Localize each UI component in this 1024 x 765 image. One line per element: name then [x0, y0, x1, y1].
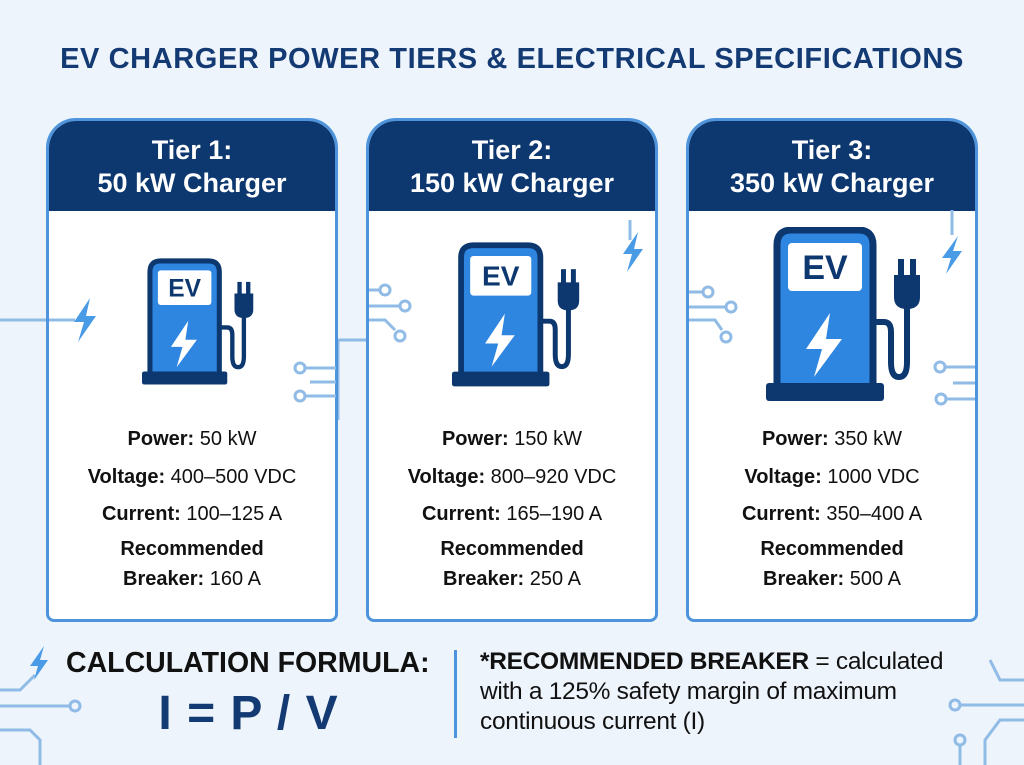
- panel: tier 3: [686, 118, 978, 622]
- heading tier 2: 150 kW Charger: [410, 168, 614, 198]
- divider: [454, 650, 457, 738]
- icon: charger tier 2: EV: [482, 261, 520, 292]
- specs tier 1: Voltage: 400–500 VDC: [88, 466, 296, 488]
- breaker note: continuous current (I): [480, 708, 705, 735]
- icon: charger tier 3: [766, 227, 920, 401]
- heading tier 2: [369, 121, 655, 211]
- formula heading: CALCULATION FORMULA:: [66, 647, 430, 679]
- specs tier 2: [408, 428, 616, 590]
- icon: charger tier 3: EV: [802, 249, 848, 287]
- specs tier 1: Recommended: [120, 538, 264, 560]
- specs tier 2: Voltage: 800–920 VDC: [408, 466, 616, 488]
- panel: tier 2: [366, 118, 658, 622]
- specs tier 1: [88, 428, 296, 590]
- specs tier 2: Recommended: [440, 538, 584, 560]
- icon: charger tier 2: [452, 242, 580, 386]
- specs tier 1: Current: 100–125 A: [102, 503, 282, 525]
- breaker note: *RECOMMENDED BREAKER = calculated: [480, 648, 943, 675]
- breaker note: with a 125% safety margin of maximum: [480, 678, 897, 705]
- specs tier 2: Current: 165–190 A: [422, 503, 602, 525]
- specs tier 3: Current: 350–400 A: [742, 503, 922, 525]
- heading tier 3: Tier 3:: [792, 135, 872, 165]
- specs tier 3: Recommended: [760, 538, 904, 560]
- heading tier 1: [49, 121, 335, 211]
- title: EV CHARGER POWER TIERS & ELECTRICAL SPECIFICATIONS: [60, 43, 964, 75]
- heading tier 1: 50 kW Charger: [97, 168, 287, 198]
- specs tier 3: Voltage: 1000 VDC: [744, 466, 920, 488]
- specs tier 2: Power: 150 kW: [442, 428, 582, 450]
- formula: I = P / V: [158, 687, 339, 740]
- heading tier 3: 350 kW Charger: [730, 168, 934, 198]
- panel: tier 1: [46, 118, 338, 622]
- specs tier 1: Breaker: 160 A: [123, 568, 261, 590]
- icon: charger tier 1: EV: [168, 275, 202, 302]
- specs tier 1: Power: 50 kW: [128, 428, 256, 450]
- specs tier 3: [742, 428, 922, 590]
- specs tier 2: Breaker: 250 A: [443, 568, 581, 590]
- specs tier 3: Power: 350 kW: [762, 428, 902, 450]
- heading tier 1: Tier 1:: [152, 135, 232, 165]
- specs tier 3: Breaker: 500 A: [763, 568, 901, 590]
- icon: charger tier 1: [142, 258, 254, 384]
- heading tier 2: Tier 2:: [472, 135, 552, 165]
- breaker note: [480, 648, 943, 735]
- heading tier 3: [689, 121, 975, 211]
